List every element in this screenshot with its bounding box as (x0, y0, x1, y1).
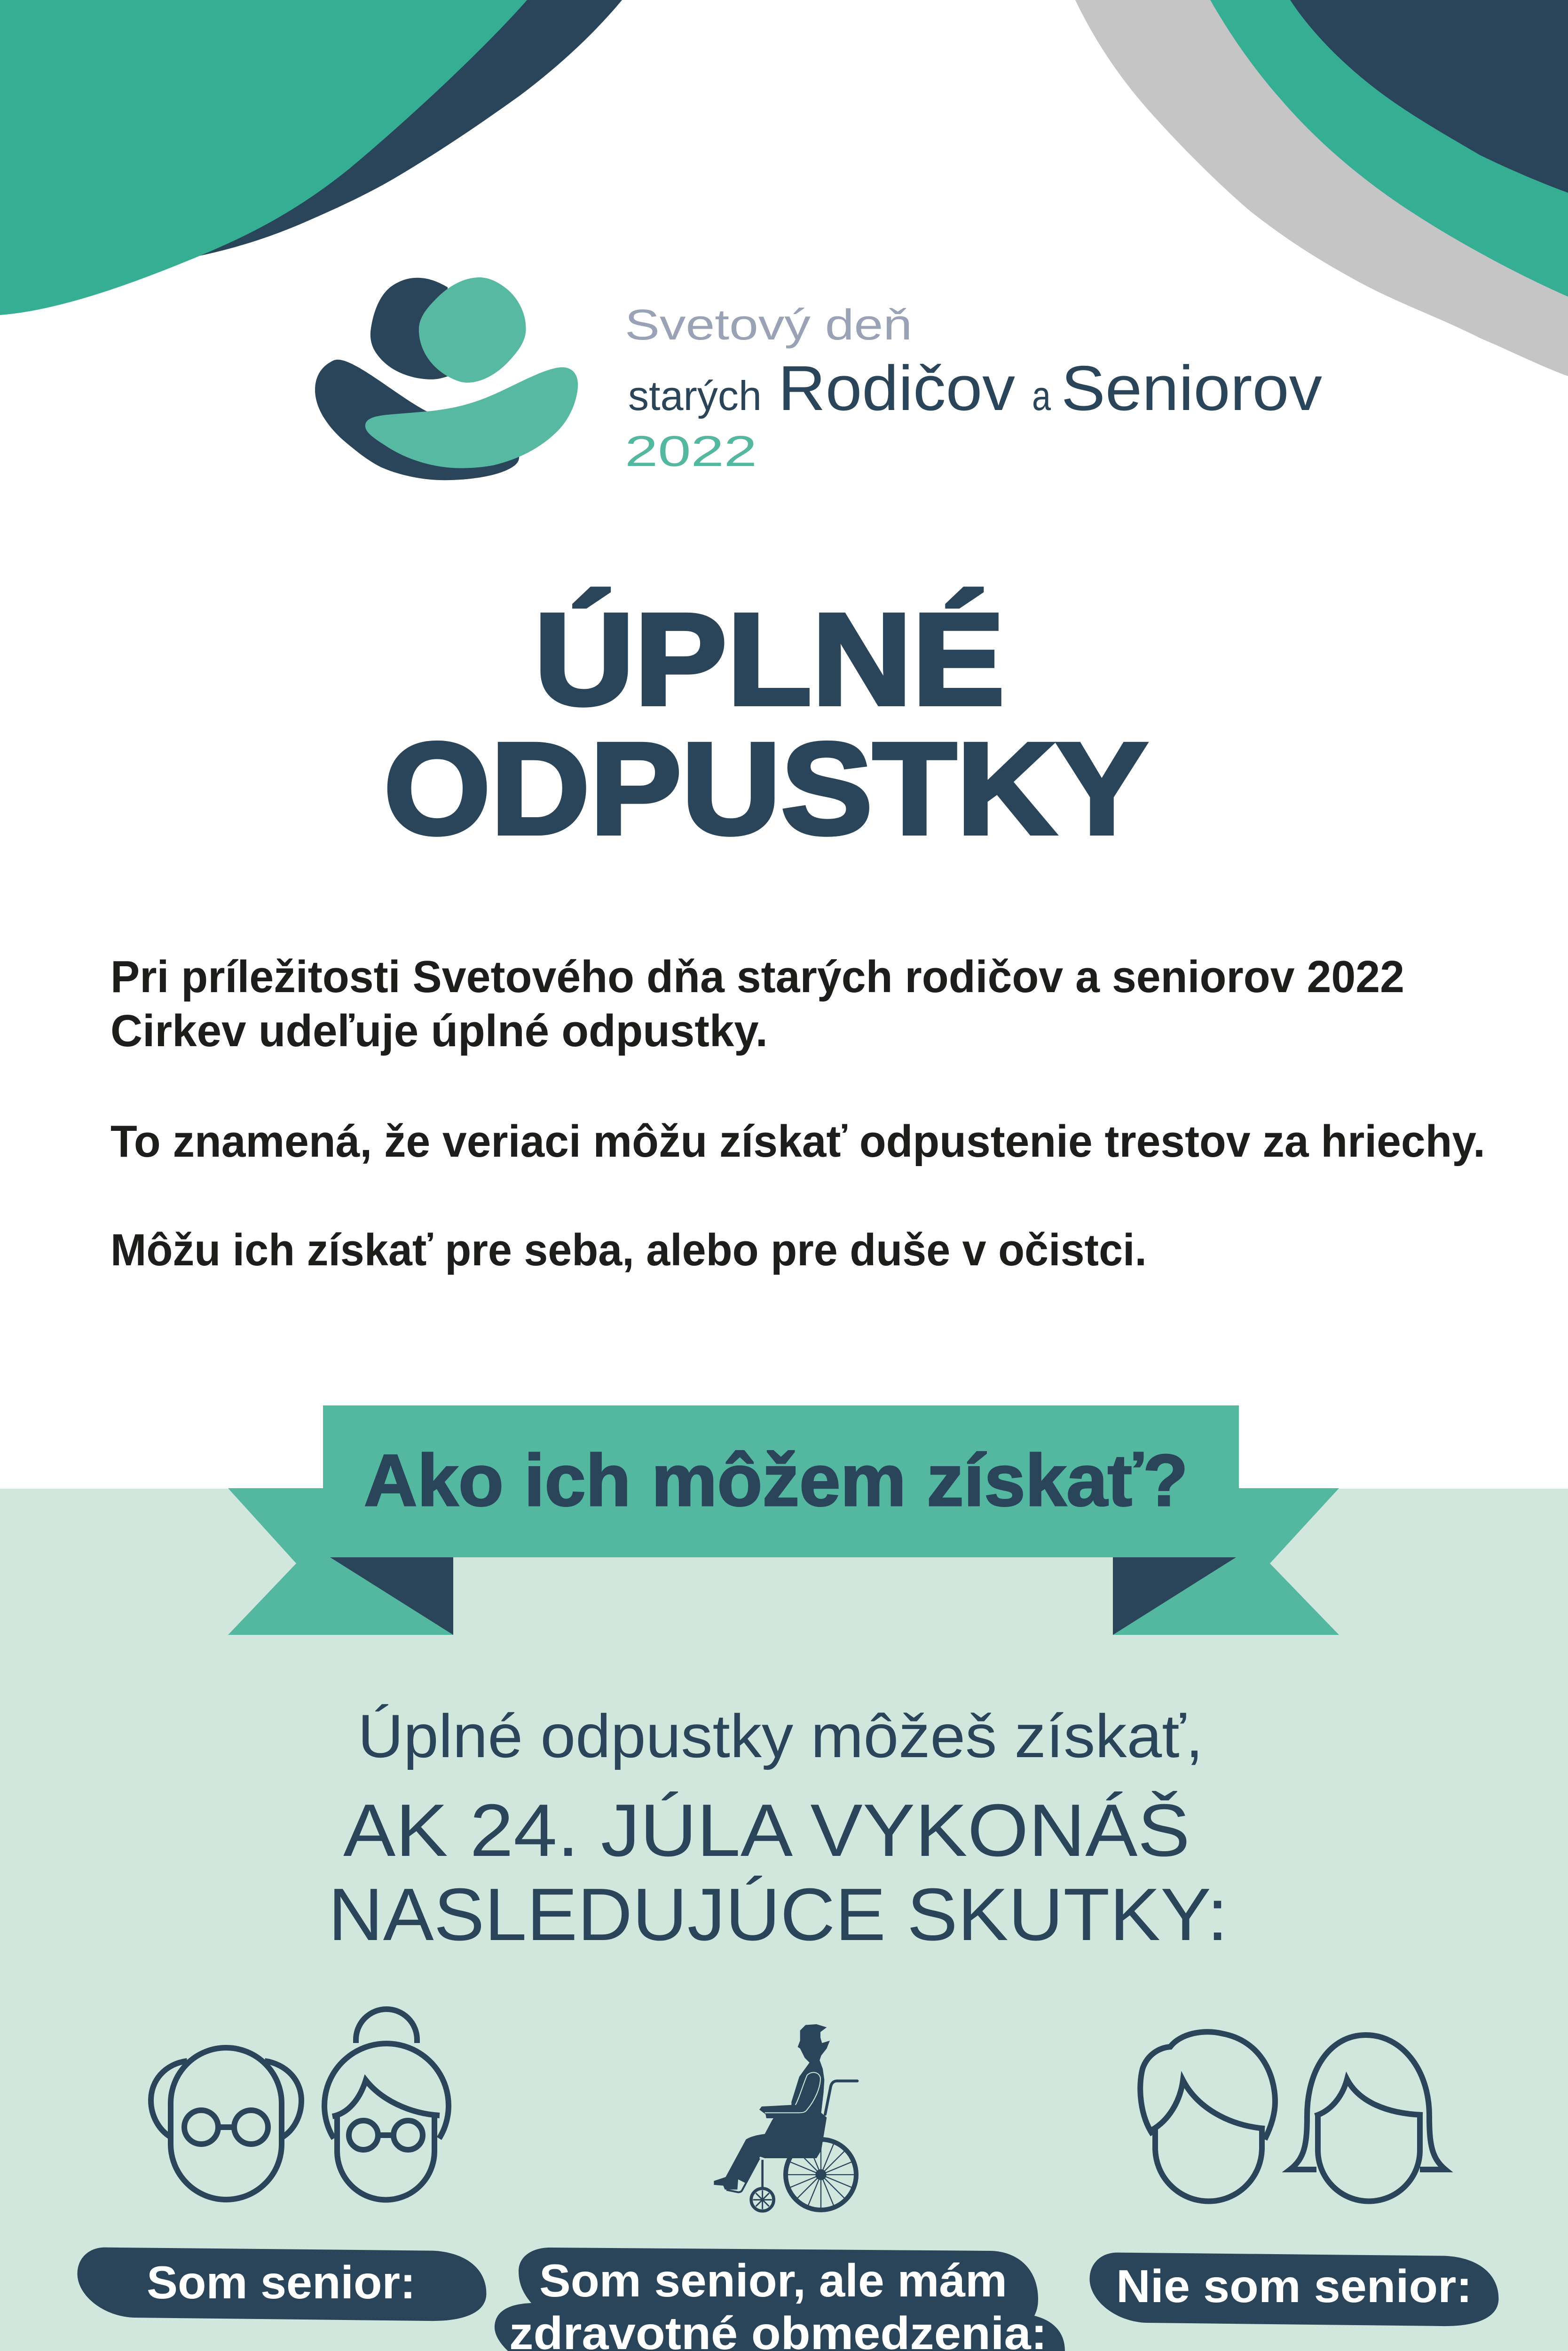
column 1: senior: Som senior: (147, 2256, 416, 2308)
logo: World Day of Grandparents and the Elderly: starých (628, 372, 762, 419)
panel: how to obtain background (0, 1489, 1568, 2351)
title: ÚPLNÉ (534, 586, 1005, 732)
pill label (1090, 2253, 1498, 2326)
column 3: not senior (1052, 2253, 1508, 2351)
pill label (78, 2248, 486, 2321)
intro text: Môžu ich získať pre seba, alebo pre duše v očistci. (110, 1225, 1147, 1275)
subheading (328, 1702, 1228, 1956)
logo: World Day of Grandparents and the Elderly (315, 277, 1323, 480)
title (384, 586, 1148, 861)
icon: young couple (1140, 2032, 1445, 2201)
ribbon banner (228, 1405, 1339, 1635)
column 2: senior with health limits (495, 2248, 1065, 2351)
column 1: senior (78, 2248, 486, 2351)
logo text: Svetový deň (625, 301, 912, 349)
intro text: Cirkev udeľuje úplné odpustky. (110, 1006, 768, 1056)
icon: embracing figures (315, 277, 578, 480)
pill label (495, 2248, 1065, 2351)
subheading: AK 24. JÚLA VYKONÁŠ (343, 1789, 1190, 1872)
title: ODPUSTKY (384, 715, 1148, 861)
column 2: senior with health limits: Som senior, ale mám (539, 2255, 1007, 2306)
logo: World Day of Grandparents and the Elderly: Rodičov (778, 353, 1016, 424)
logo: World Day of Grandparents and the Elderly: a (1032, 372, 1051, 419)
top left corner waves (0, 0, 622, 315)
icon: person in wheelchair (714, 2024, 857, 2211)
intro text: Pri príležitosti Svetového dňa starých rodičov a seniorov 2022 (110, 952, 1404, 1002)
subheading: Úplné odpustky môžeš získať, (358, 1702, 1203, 1770)
intro text: To znamená, že veriaci môžu získať odpustenie trestov za hriechy. (110, 1116, 1485, 1167)
subheading: NASLEDUJÚCE SKUTKY: (328, 1873, 1228, 1956)
logo: World Day of Grandparents and the Elderly: Seniorov (1061, 353, 1323, 424)
top right corner waves (1075, 0, 1568, 376)
intro text (110, 952, 1485, 1275)
ribbon heading: Ako ich môžem získať? (364, 1440, 1188, 1522)
logo: World Day of Grandparents and the Elderly: 2022 (625, 427, 757, 475)
icon: elderly couple (151, 2009, 449, 2200)
column 3: not senior: Nie som senior: (1116, 2260, 1472, 2312)
